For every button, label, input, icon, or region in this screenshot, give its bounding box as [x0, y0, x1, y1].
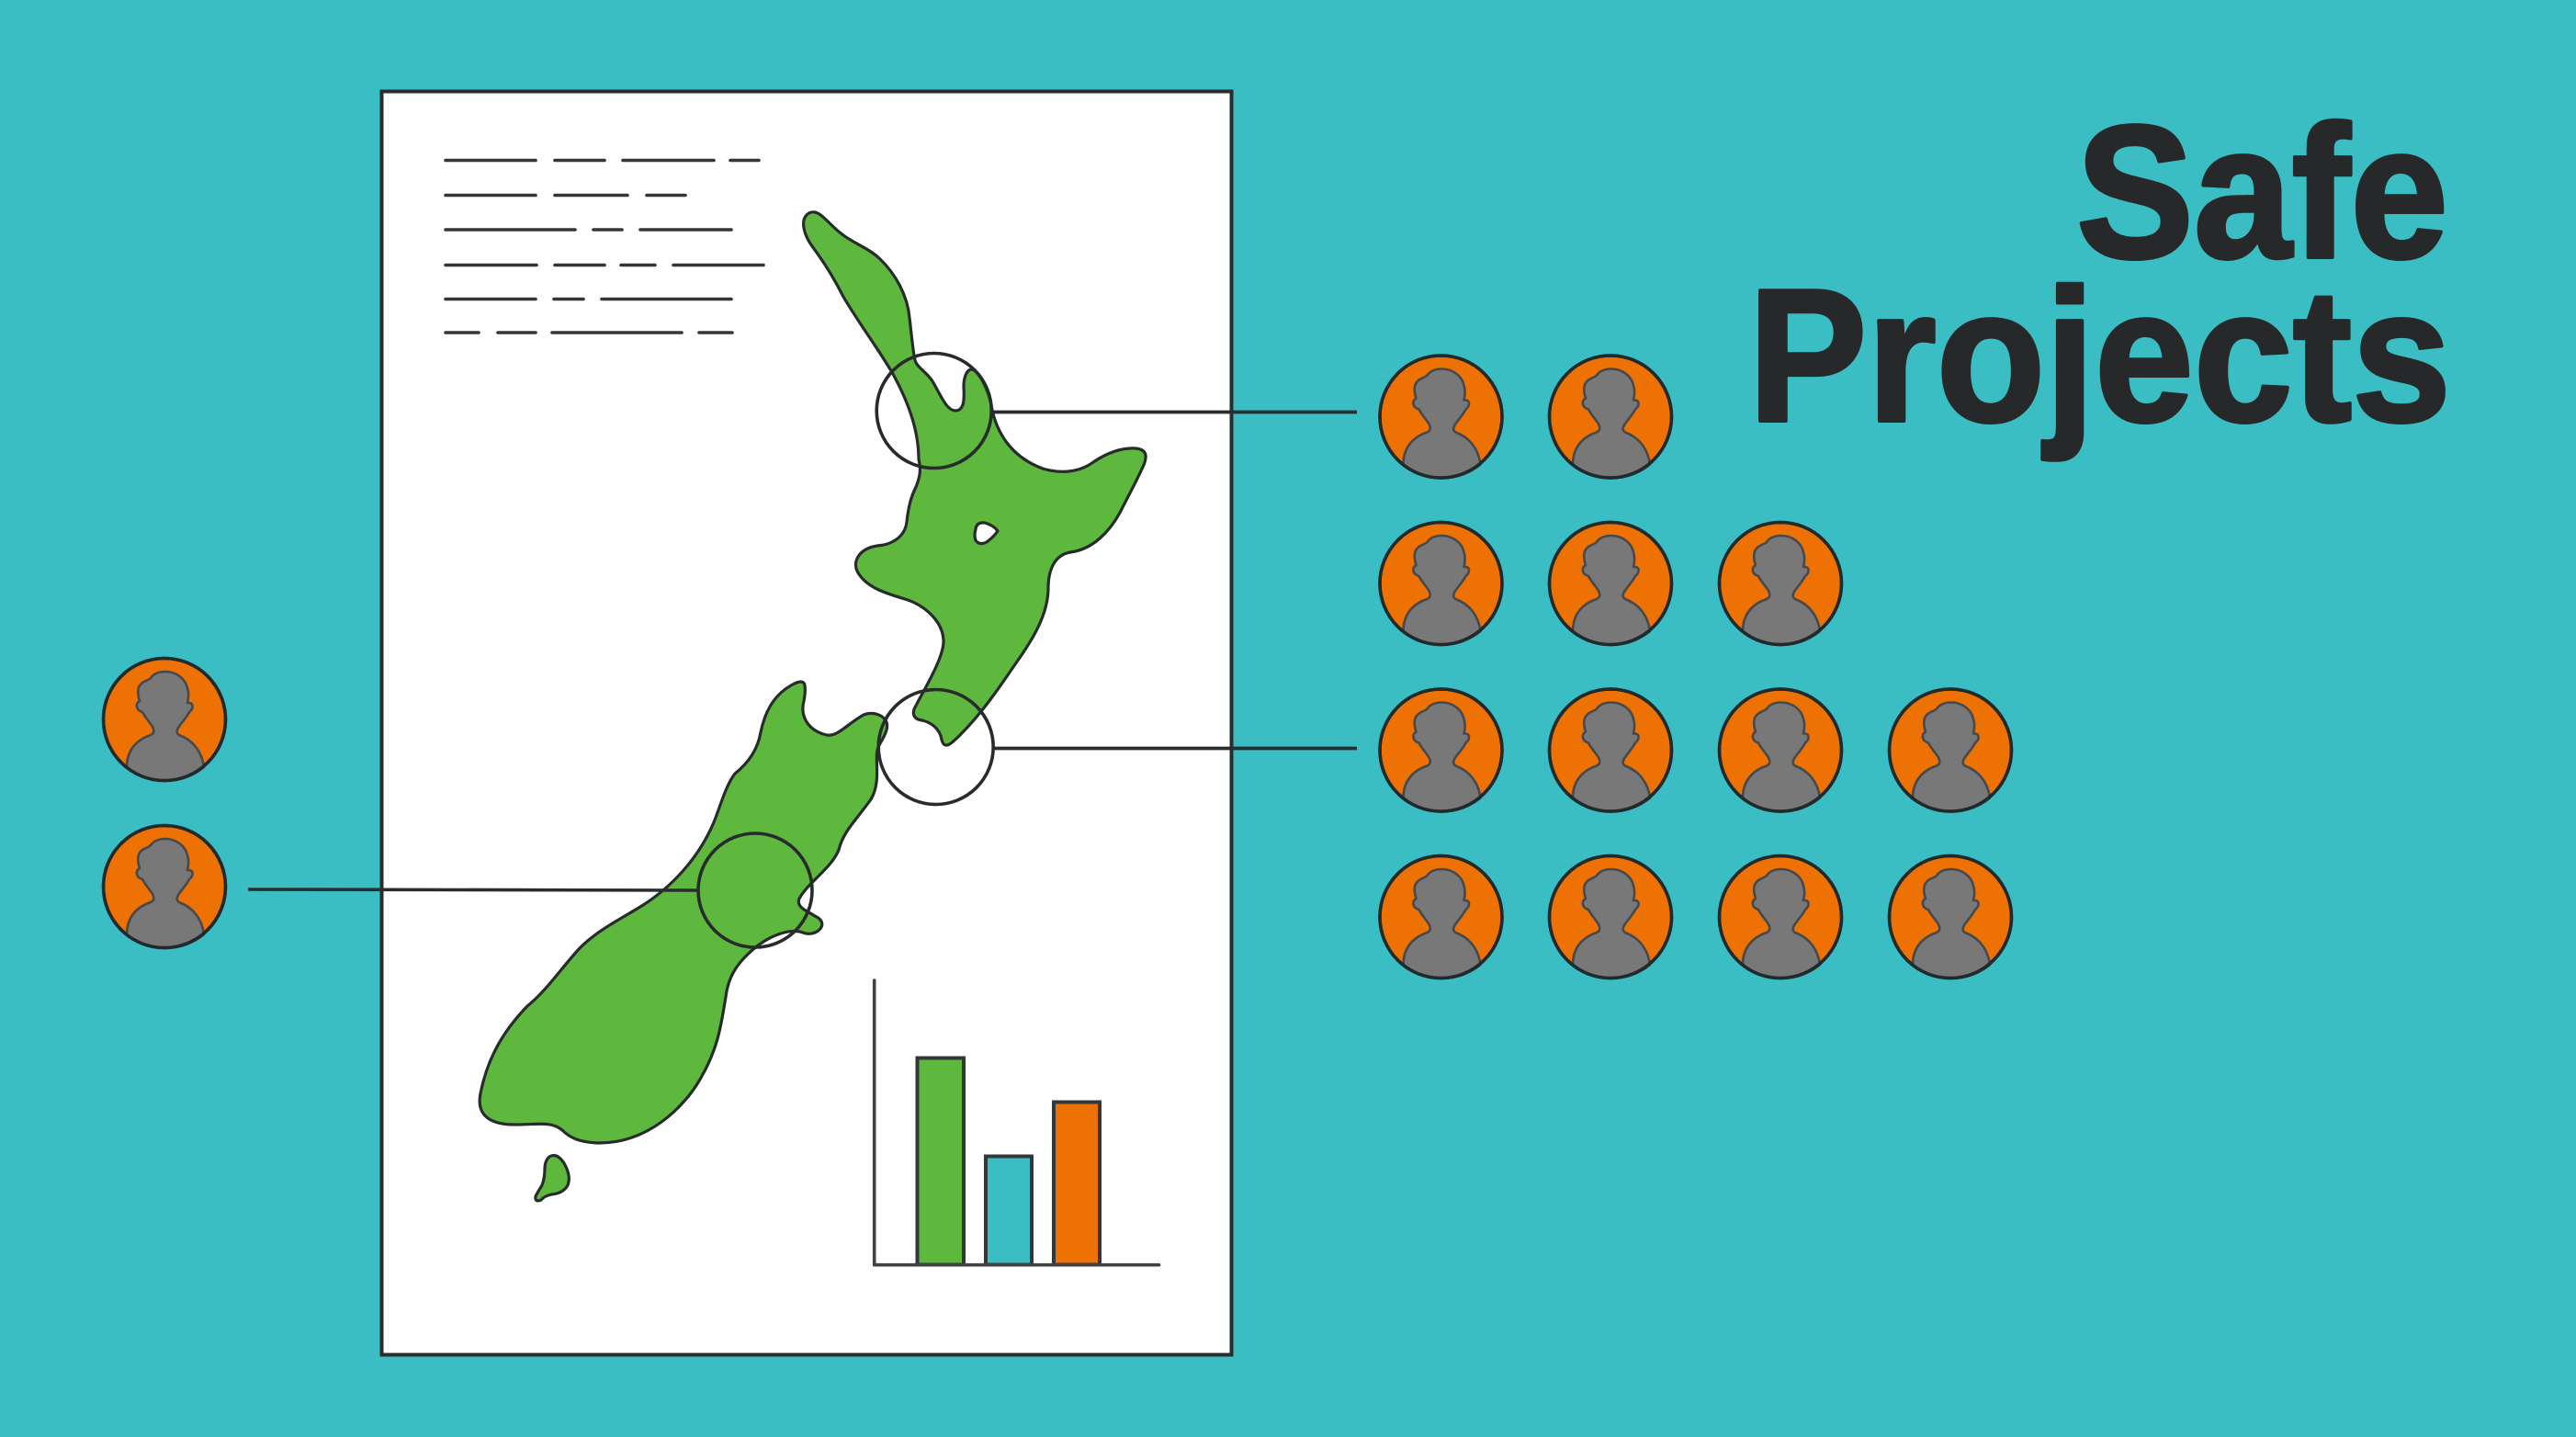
- connector line: south: [248, 889, 698, 890]
- callout: circle centre: [878, 689, 993, 805]
- icon: person: [1889, 689, 2012, 811]
- people group: row 3: [1380, 689, 2012, 811]
- icon: person: [103, 825, 226, 948]
- Stewart Island: [536, 1156, 569, 1201]
- connector line: north: [991, 411, 1357, 413]
- icon: person: [103, 658, 226, 781]
- icon: person: [1720, 856, 1841, 979]
- icon: person: [1720, 522, 1841, 645]
- icon: person: [1380, 522, 1502, 645]
- South Island: [480, 682, 887, 1143]
- bar: orange: [1054, 1103, 1100, 1264]
- people group: row 4: [1380, 856, 2012, 979]
- chart axes: [875, 980, 1159, 1265]
- icon: person: [1549, 356, 1672, 478]
- title: Projects: [1748, 250, 2451, 461]
- icon: person: [1380, 356, 1502, 478]
- people group: left: [103, 658, 226, 948]
- bar chart: [875, 980, 1159, 1265]
- Lake Taupo: [975, 523, 998, 544]
- bar: green: [917, 1058, 964, 1264]
- people group: row 1: [1380, 356, 1672, 478]
- title: [1748, 86, 2451, 461]
- map of New Zealand: [480, 212, 1146, 1201]
- icon: person: [1549, 689, 1672, 811]
- icon: person: [1380, 689, 1502, 811]
- icon: person: [1549, 522, 1672, 645]
- people group: row 2: [1380, 522, 1841, 645]
- North Island: [804, 212, 1146, 745]
- title: Safe: [2076, 86, 2448, 298]
- icon: person: [1380, 856, 1502, 979]
- icon: person: [1889, 856, 2012, 979]
- icon: person: [1549, 856, 1672, 979]
- callout: circle south: [698, 833, 812, 947]
- icon: person: [1720, 689, 1841, 811]
- connector line: centre: [993, 747, 1357, 750]
- panel: document page: [382, 92, 1231, 1354]
- text block: placeholder text lines: [446, 160, 763, 333]
- bar: teal: [986, 1156, 1032, 1264]
- callout: circle north: [876, 353, 991, 469]
